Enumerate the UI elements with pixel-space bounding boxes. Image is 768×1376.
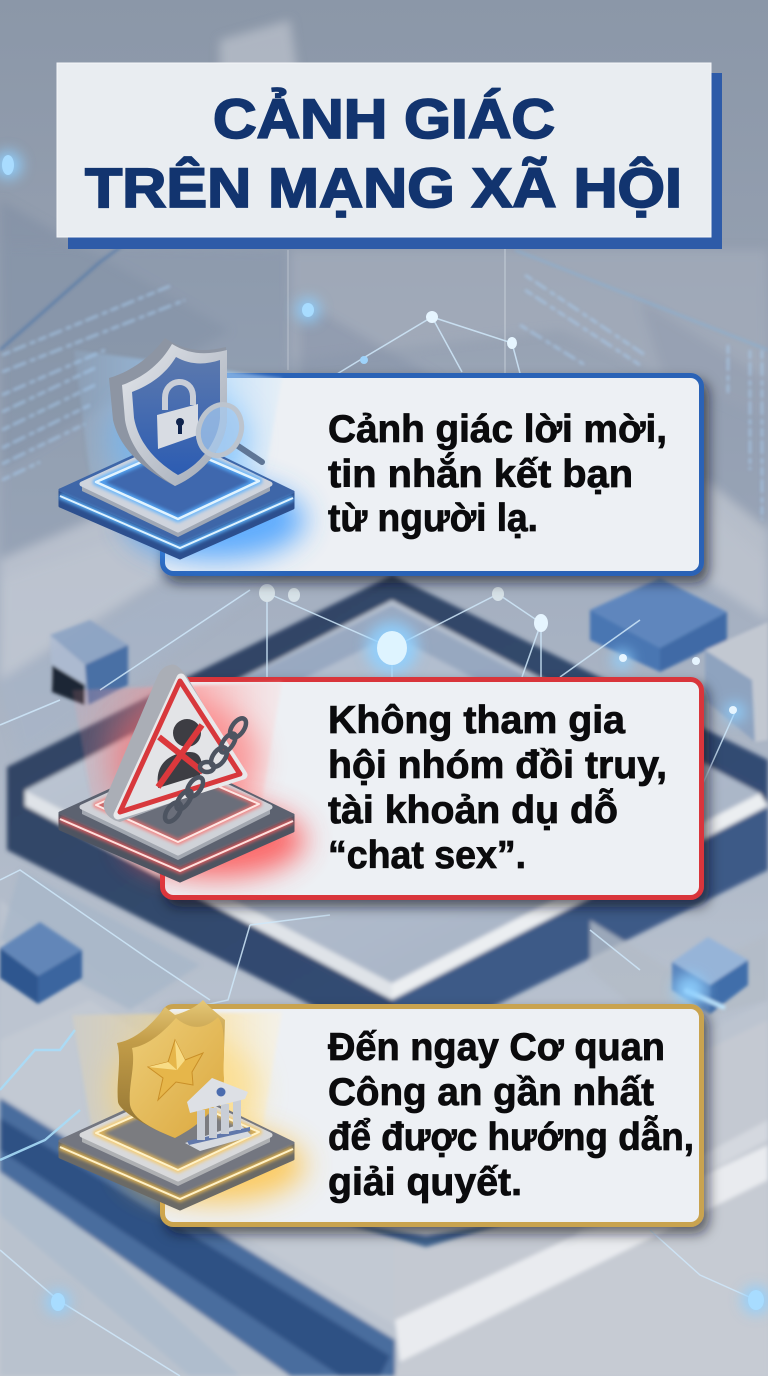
- title text: [85, 87, 682, 219]
- card text: tài khoản dụ dỗ: [328, 788, 618, 832]
- card frame: [162, 680, 702, 898]
- title banner: [57, 63, 722, 249]
- card text: tin nhắn kết bạn: [328, 452, 633, 496]
- title text: CẢNH GIÁC: [213, 87, 555, 150]
- card text: từ người lạ.: [328, 497, 538, 540]
- card text: giải quyết.: [328, 1161, 522, 1204]
- card text: [328, 408, 667, 540]
- icon: gold police badge with government building: [60, 1000, 305, 1209]
- panel: harmful groups warning card: [162, 680, 702, 898]
- title panel: [57, 63, 711, 237]
- lower isometric platform: [0, 900, 768, 1376]
- card text: Không tham gia: [328, 699, 625, 742]
- title offset shadow block: [68, 73, 722, 249]
- panel: stranger warning card: [162, 376, 702, 574]
- card text: “chat sex”.: [328, 834, 526, 877]
- glass cubes: [0, 578, 768, 1014]
- card text: Công an gần nhất: [328, 1071, 654, 1114]
- panel: contact police card: [162, 1006, 702, 1224]
- title text: TRÊN MẠNG XÃ HỘI: [85, 156, 682, 219]
- card frame: [162, 376, 702, 574]
- card text: Cảnh giác lời mời,: [328, 408, 667, 451]
- icon: shield with padlock and magnifier: [60, 338, 305, 560]
- card text: để được hướng dẫn,: [328, 1115, 694, 1159]
- central isometric platform: [0, 575, 768, 1247]
- card frame: [162, 1006, 702, 1224]
- card text: [328, 699, 667, 877]
- card text: hội nhóm đồi truy,: [328, 744, 667, 787]
- icon: warning triangle with crossed person and broken chain: [60, 665, 305, 881]
- card text: [328, 1026, 694, 1204]
- card text: Đến ngay Cơ quan: [328, 1026, 665, 1069]
